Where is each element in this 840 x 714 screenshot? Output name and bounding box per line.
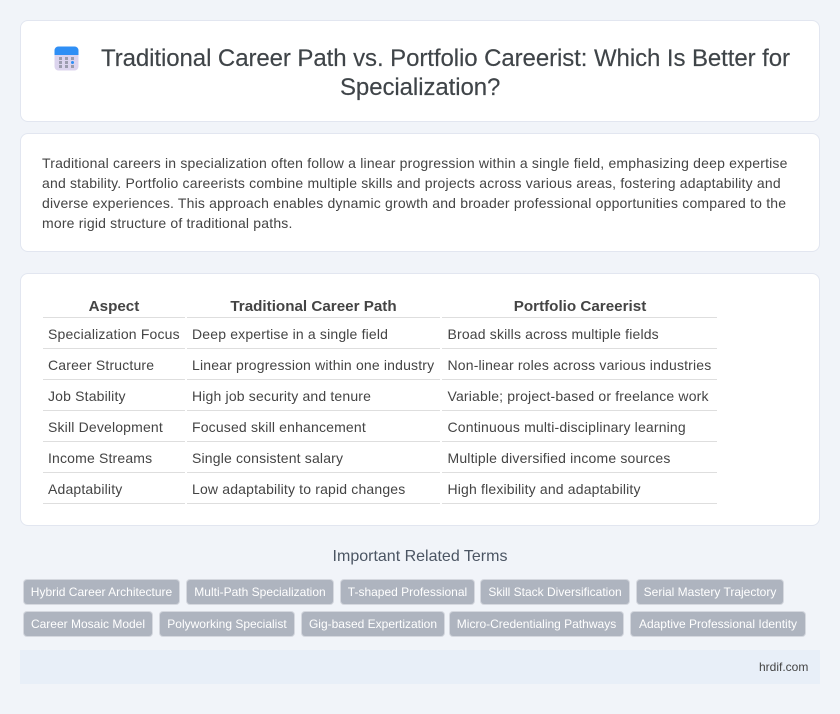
related term tags: Adaptive Professional Identity	[639, 617, 797, 631]
comparison table: Deep expertise in a single field	[192, 326, 388, 342]
comparison table: Job Stability	[48, 388, 126, 404]
comparison table: Broad skills across multiple fields	[448, 326, 659, 342]
comparison table: Variable; project-based or freelance work	[448, 388, 709, 404]
comparison table: High job security and tenure	[192, 388, 371, 404]
related term tags: Serial Mastery Trajectory	[644, 585, 776, 599]
comparison table: Skill Development	[48, 419, 163, 435]
comparison table: Adaptability	[48, 481, 122, 497]
comparison table: Linear progression within one industry	[192, 357, 434, 373]
related term tags: Skill Stack Diversification	[488, 585, 622, 599]
related term tags: Multi-Path Specialization	[194, 585, 326, 599]
footer source: hrdif.com	[759, 660, 808, 674]
related term tags	[23, 579, 806, 637]
comparison table: Career Structure	[48, 357, 154, 373]
comparison table: Portfolio Careerist	[514, 298, 646, 315]
title	[101, 45, 790, 101]
intro text: more rigid structure of traditional paths.	[42, 215, 293, 231]
footer bar	[20, 650, 820, 684]
intro text: and stability. Portfolio careerists combine multiple skills and projects across various areas, fostering adaptability and	[42, 175, 781, 191]
related term tags: Micro-Credentialing Pathways	[457, 617, 616, 631]
title: Traditional Career Path vs. Portfolio Careerist: Which Is Better for	[101, 45, 790, 72]
related term tags: T-shaped Professional	[348, 585, 467, 599]
comparison table: Non-linear roles across various industries	[448, 357, 711, 373]
comparison table: Multiple diversified income sources	[448, 450, 671, 466]
comparison table: Aspect	[89, 298, 139, 315]
header card	[20, 20, 820, 122]
comparison table: Focused skill enhancement	[192, 419, 366, 435]
comparison table: High flexibility and adaptability	[448, 481, 641, 497]
intro text	[42, 155, 788, 231]
comparison table: Single consistent salary	[192, 450, 343, 466]
table card	[20, 273, 820, 526]
related term tags: Gig-based Expertization	[309, 617, 437, 631]
comparison table: Income Streams	[48, 450, 152, 466]
icon: calendar	[54, 46, 78, 70]
comparison table	[43, 298, 717, 504]
intro text: diverse experiences. This approach enables dynamic growth and broader professional opportunities compared to the	[42, 195, 786, 211]
intro text: Traditional careers in specialization often follow a linear progression within a single field, emphasizing deep expertise	[42, 155, 788, 171]
comparison table: Low adaptability to rapid changes	[192, 481, 405, 497]
comparison table: Continuous multi-disciplinary learning	[448, 419, 686, 435]
related term tags: Hybrid Career Architecture	[31, 585, 172, 599]
related terms heading: Important Related Terms	[333, 548, 507, 565]
title: Specialization?	[340, 74, 500, 101]
comparison table: Specialization Focus	[48, 326, 180, 342]
related term tags: Career Mosaic Model	[31, 617, 145, 631]
comparison table: Traditional Career Path	[230, 298, 397, 315]
related term tags: Polyworking Specialist	[167, 617, 287, 631]
intro card	[20, 133, 820, 252]
